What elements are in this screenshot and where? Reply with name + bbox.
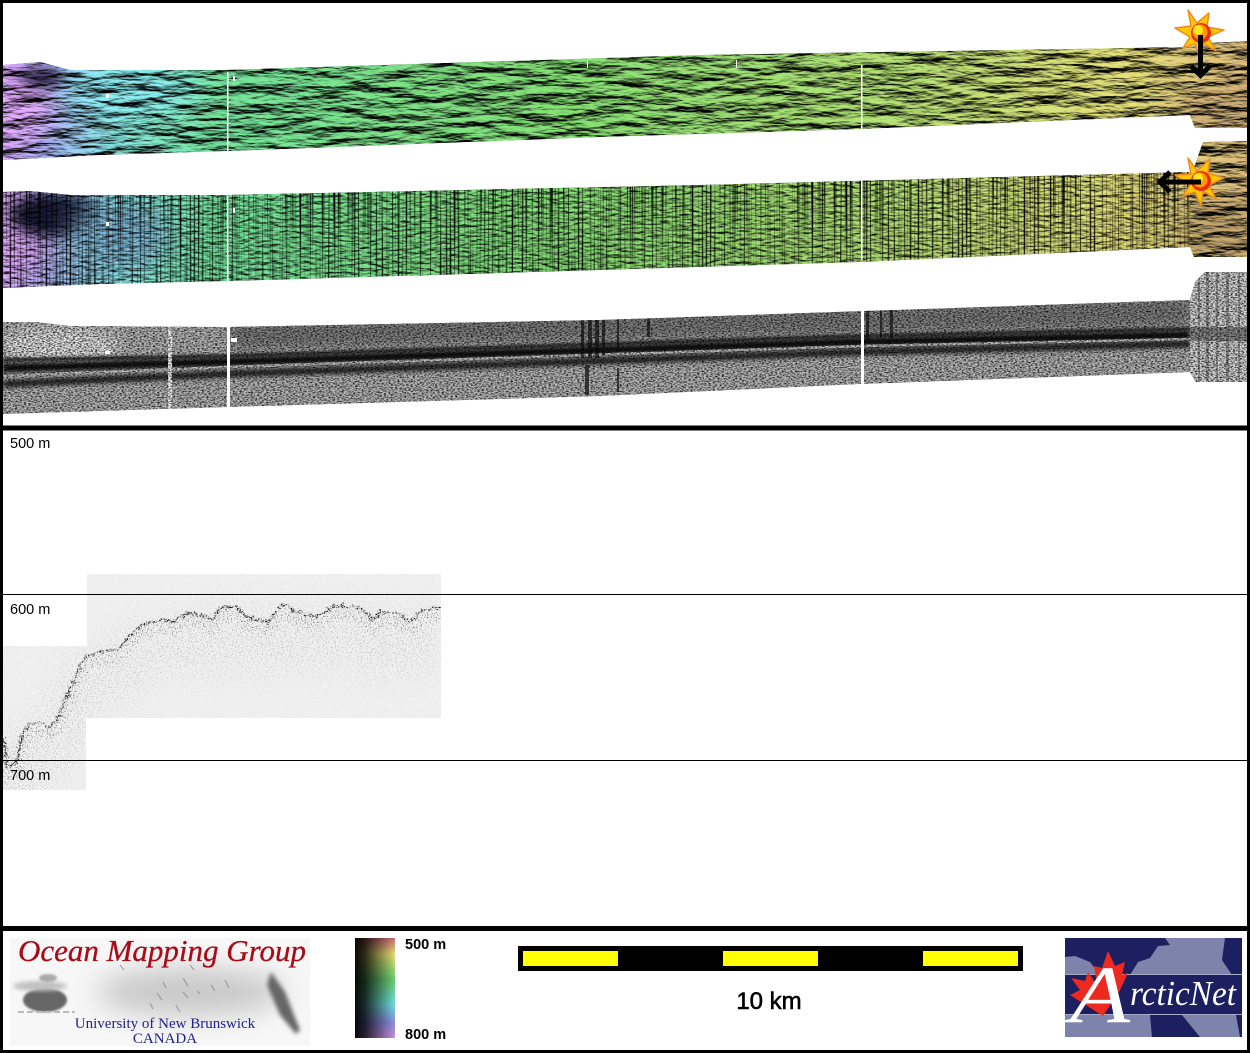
- legend labels: [405, 937, 446, 1043]
- swath: shaded bathymetry: [0, 35, 1250, 165]
- depth grid lines: [3, 594, 1247, 761]
- arrow: left: [1160, 172, 1201, 192]
- legend labels: 500 m: [405, 937, 446, 953]
- panel: survey swaths: [0, 35, 1250, 420]
- logo subtitle: University of New Brunswick: [75, 1016, 256, 1032]
- seafloor trace: [3, 604, 441, 767]
- swath: striped bathymetry: [0, 135, 1250, 295]
- depth labels: 500 m: [10, 436, 50, 452]
- depth labels: [10, 436, 50, 784]
- logo country: CANADA: [133, 1031, 197, 1047]
- depth labels: 700 m: [10, 768, 50, 784]
- data gaps: [105, 60, 864, 408]
- chart: depth profile: [3, 574, 441, 790]
- map land shapes: [1065, 938, 1240, 1037]
- logo: ArcticNet: [1064, 938, 1242, 1040]
- echogram speckle: [3, 574, 441, 790]
- scale label: 10 km: [736, 988, 802, 1015]
- logo: ArcticNet: rcticNet: [1130, 974, 1237, 1013]
- echogram background: [3, 574, 441, 790]
- swath: backscatter: [0, 265, 1250, 420]
- title band: [1065, 975, 1242, 1014]
- maple leaf: [1070, 951, 1128, 1016]
- icon: sun marker on middle swath: [1175, 158, 1224, 206]
- scale bar: [518, 946, 1023, 971]
- logo: Ocean Mapping Group: [10, 934, 310, 1047]
- arrow: down: [1191, 35, 1210, 76]
- legend labels: 800 m: [405, 1027, 446, 1043]
- logo title: Ocean Mapping Group: [18, 934, 306, 968]
- icon: sun marker on upper swath: [1175, 10, 1224, 58]
- legend: depth colour bar: [355, 938, 395, 1038]
- logotype: A: [1064, 949, 1131, 1040]
- depth labels: 600 m: [10, 602, 50, 618]
